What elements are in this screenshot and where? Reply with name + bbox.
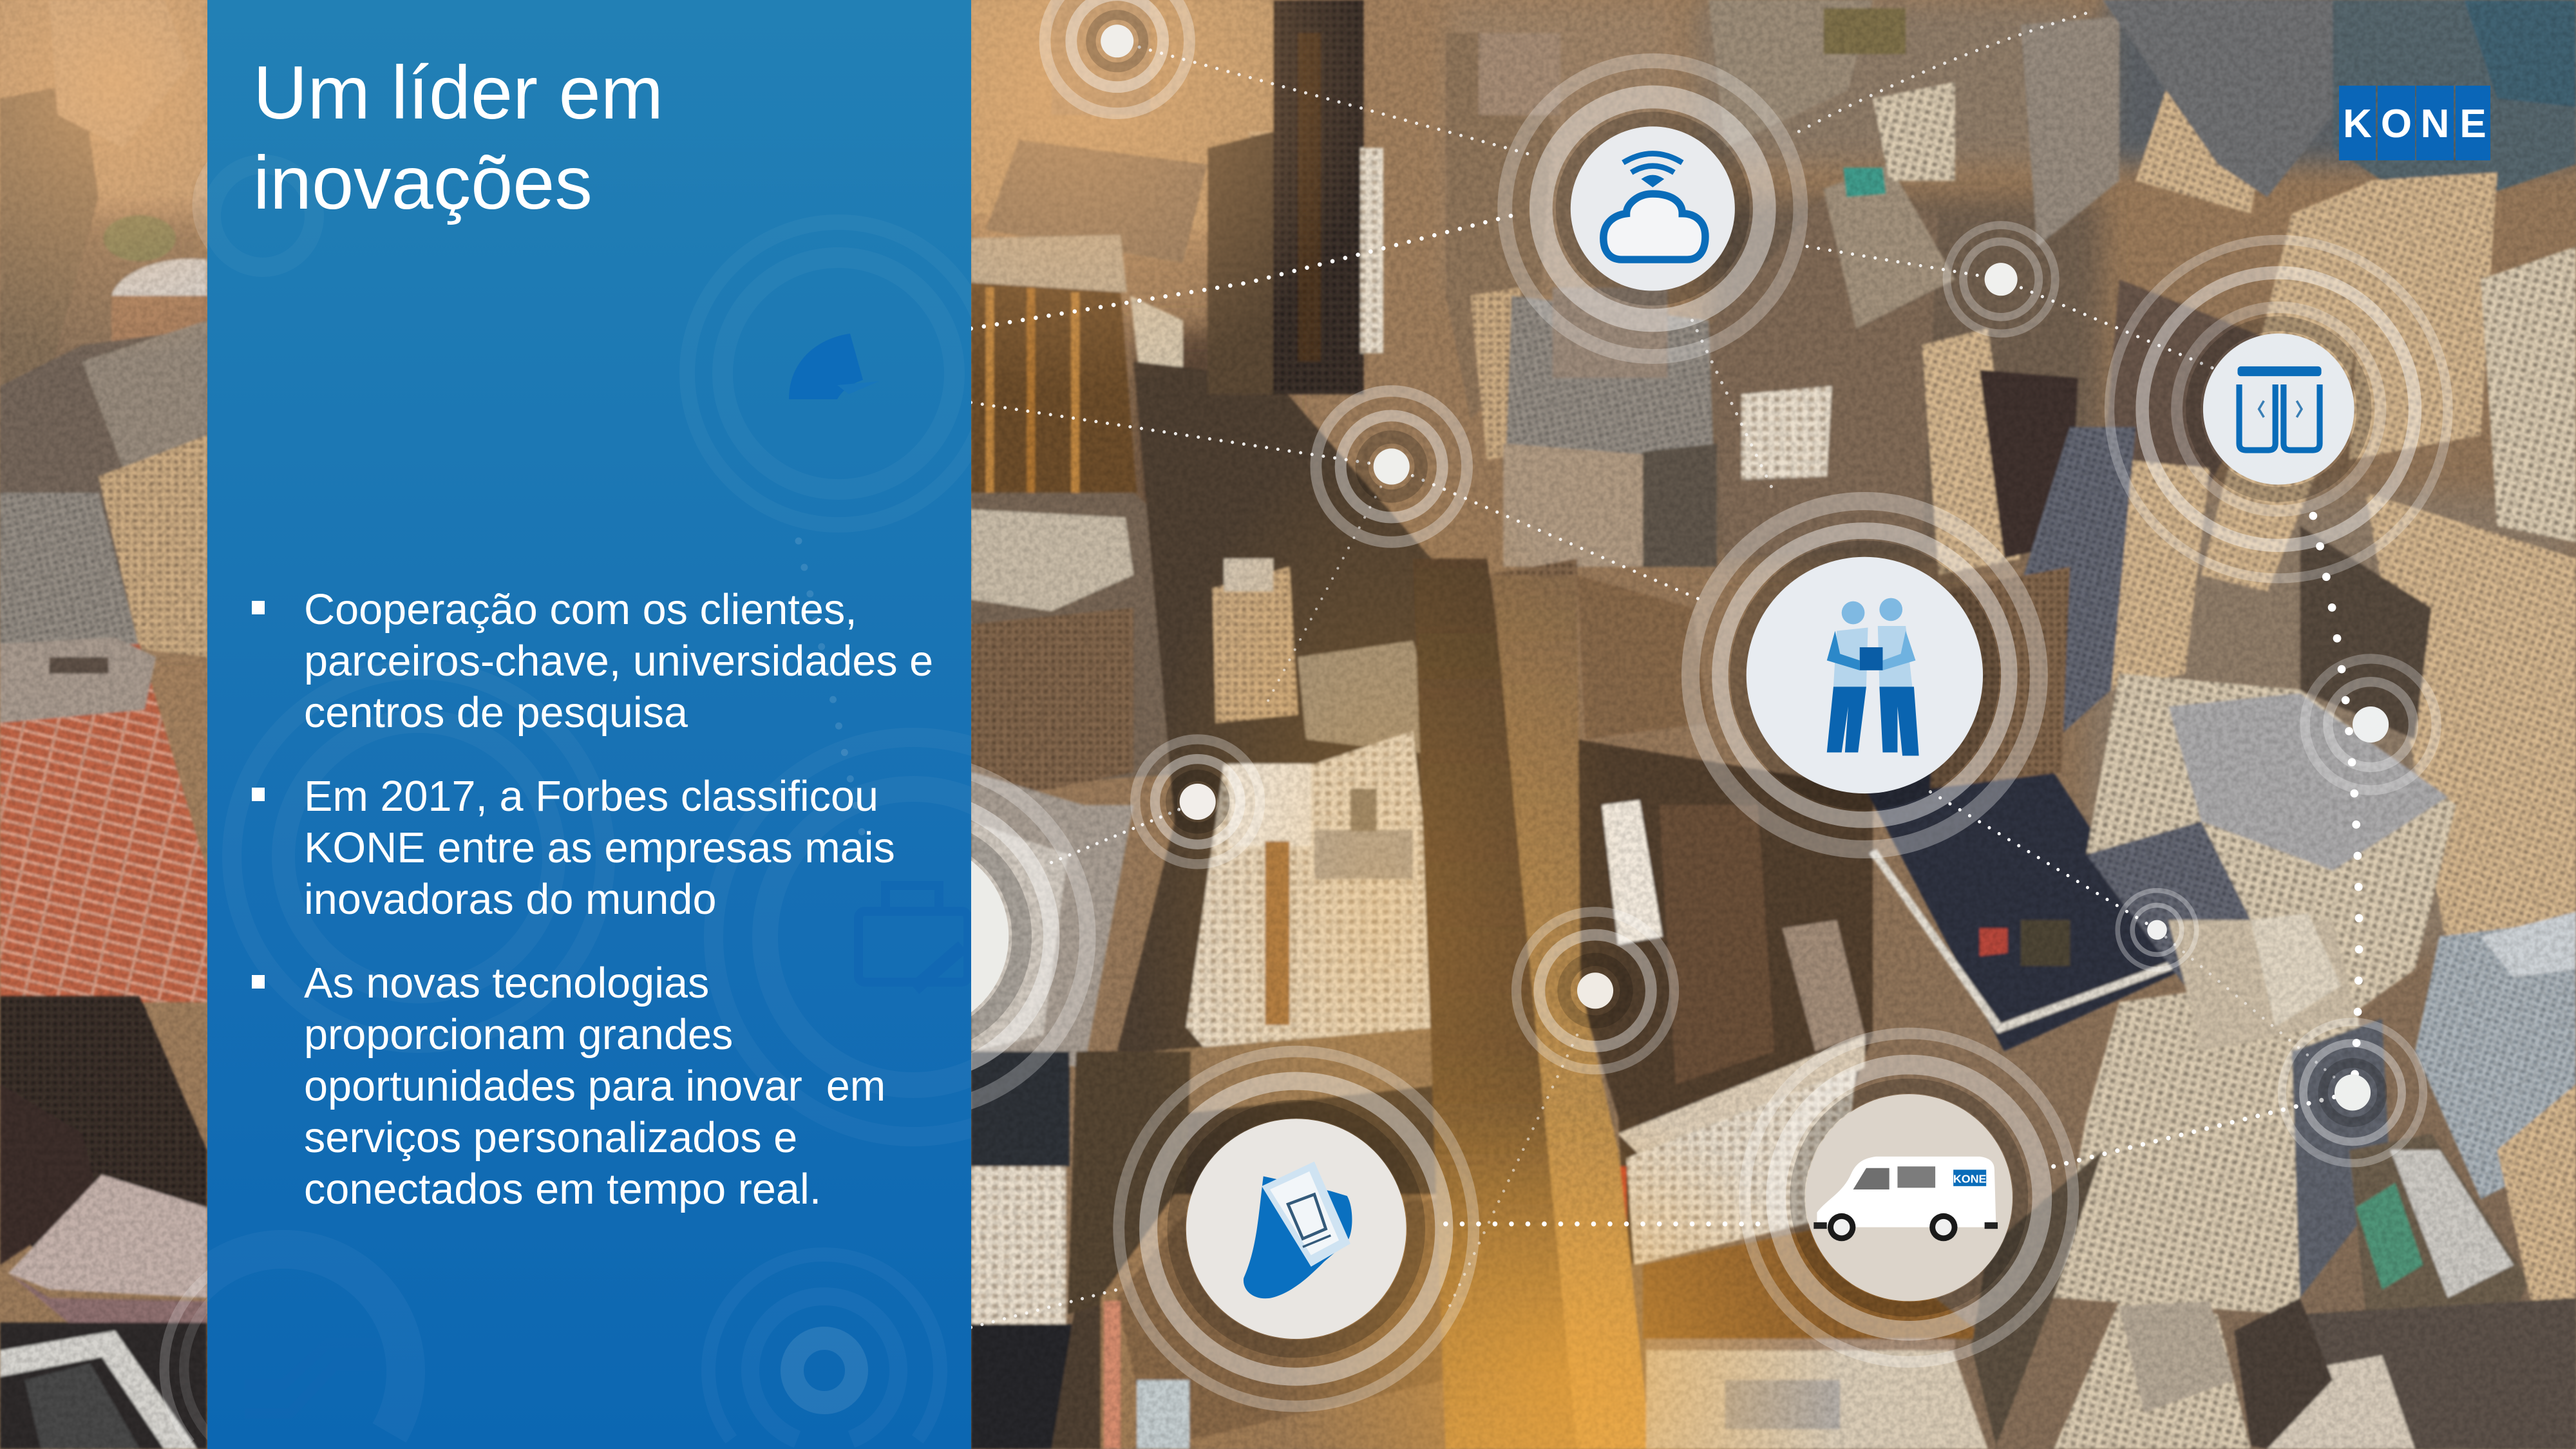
ghost dotted trail bbox=[799, 541, 863, 837]
right towers bbox=[2349, 173, 2497, 460]
bullet text 3: oportunidades para inovar em bbox=[304, 1063, 886, 1110]
bullet text 2: KONE entre as empresas mais bbox=[304, 824, 895, 872]
bullet marker 3 bbox=[252, 975, 265, 989]
bullet text 1: parceiros-chave, universidades e bbox=[304, 638, 933, 685]
node top bbox=[1045, 0, 1189, 113]
node centre left bbox=[1135, 739, 1260, 864]
tan block bbox=[1213, 567, 1298, 723]
right blue-grey building bbox=[2415, 920, 2576, 1199]
lower cream tower bbox=[2054, 969, 2382, 1314]
bullet text 1 bbox=[304, 586, 933, 737]
golden brown building left bbox=[971, 276, 1137, 493]
bullet marker 1 bbox=[252, 601, 265, 614]
node dark roof bbox=[2117, 891, 2197, 969]
ghost network pattern bbox=[207, 334, 971, 1448]
bullet text 3: proporcionam grandes bbox=[304, 1011, 733, 1059]
icon disc: cloud connectivity bbox=[1505, 61, 1801, 357]
white central building bbox=[1186, 731, 1446, 1052]
left strip bbox=[0, 0, 207, 197]
KONE logo: O bbox=[2381, 102, 2412, 146]
dark tower top centre bbox=[1273, 0, 1363, 394]
ghost briefcase icon bbox=[858, 886, 968, 989]
KONE logo: E bbox=[2459, 102, 2486, 146]
KONE logo: K bbox=[2343, 102, 2372, 146]
bottom buildings bbox=[1646, 1344, 1988, 1449]
light and haze overlays bbox=[0, 0, 1840, 1449]
icon disc: mobile phone in hand bbox=[1119, 1052, 1473, 1406]
lower-left roofs bbox=[1068, 1052, 1191, 1314]
KONE logo bbox=[2339, 86, 2490, 160]
bullet text 2: Em 2017, a Forbes classificou bbox=[304, 773, 878, 820]
bullet text 3: serviços personalizados e bbox=[304, 1114, 797, 1162]
icon disc: service van: KONE bbox=[1953, 1173, 1987, 1186]
bullet text 3: As novas tecnologias bbox=[304, 960, 709, 1007]
top-left of the right area bbox=[971, 0, 1273, 230]
small network nodes bbox=[1045, 0, 2436, 1163]
dotted network lines bbox=[971, 13, 2359, 1327]
bullet text 3 bbox=[304, 960, 886, 1213]
low-frequency colour masses bbox=[0, 0, 2576, 953]
title bbox=[253, 50, 663, 225]
node right middle bbox=[2305, 659, 2436, 790]
icon: briefcase service disc, partly behind panel bbox=[739, 762, 1088, 1110]
bullet text 1: centros de pesquisa bbox=[304, 689, 688, 737]
icon disc: automatic doors bbox=[2110, 240, 2448, 578]
icon disc: technicians bbox=[1690, 501, 2039, 849]
KONE logo: N bbox=[2421, 102, 2449, 146]
large cream block bbox=[2087, 674, 2456, 1052]
right dark-roofed block bbox=[1857, 723, 2185, 1052]
bullet text 2: inovadoras do mundo bbox=[304, 876, 716, 923]
node upper right bbox=[1947, 225, 2055, 334]
title: Um líder em bbox=[253, 50, 663, 135]
panel: blue text panel bbox=[207, 0, 971, 1449]
icon disc: service van bbox=[1745, 1034, 2073, 1362]
ghost gauge icon bbox=[789, 334, 863, 399]
street bbox=[1052, 361, 1520, 1449]
tan central-right buildings bbox=[1446, 33, 1553, 419]
bullet text 2 bbox=[304, 773, 895, 923]
ghost escalator icon bbox=[245, 1343, 380, 1414]
title: inovações bbox=[253, 140, 592, 225]
street with golden light bbox=[1413, 558, 1643, 1449]
node centre lower bbox=[1517, 912, 1674, 1070]
node centre upper bbox=[1316, 391, 1467, 542]
bullet text 3: conectados em tempo real. bbox=[304, 1166, 821, 1213]
ghost rings on left strip bbox=[164, 143, 401, 1443]
bullet text 1: Cooperação com os clientes, bbox=[304, 586, 857, 634]
bullet marker 2 bbox=[252, 788, 265, 801]
node lower right bbox=[2282, 1022, 2423, 1163]
